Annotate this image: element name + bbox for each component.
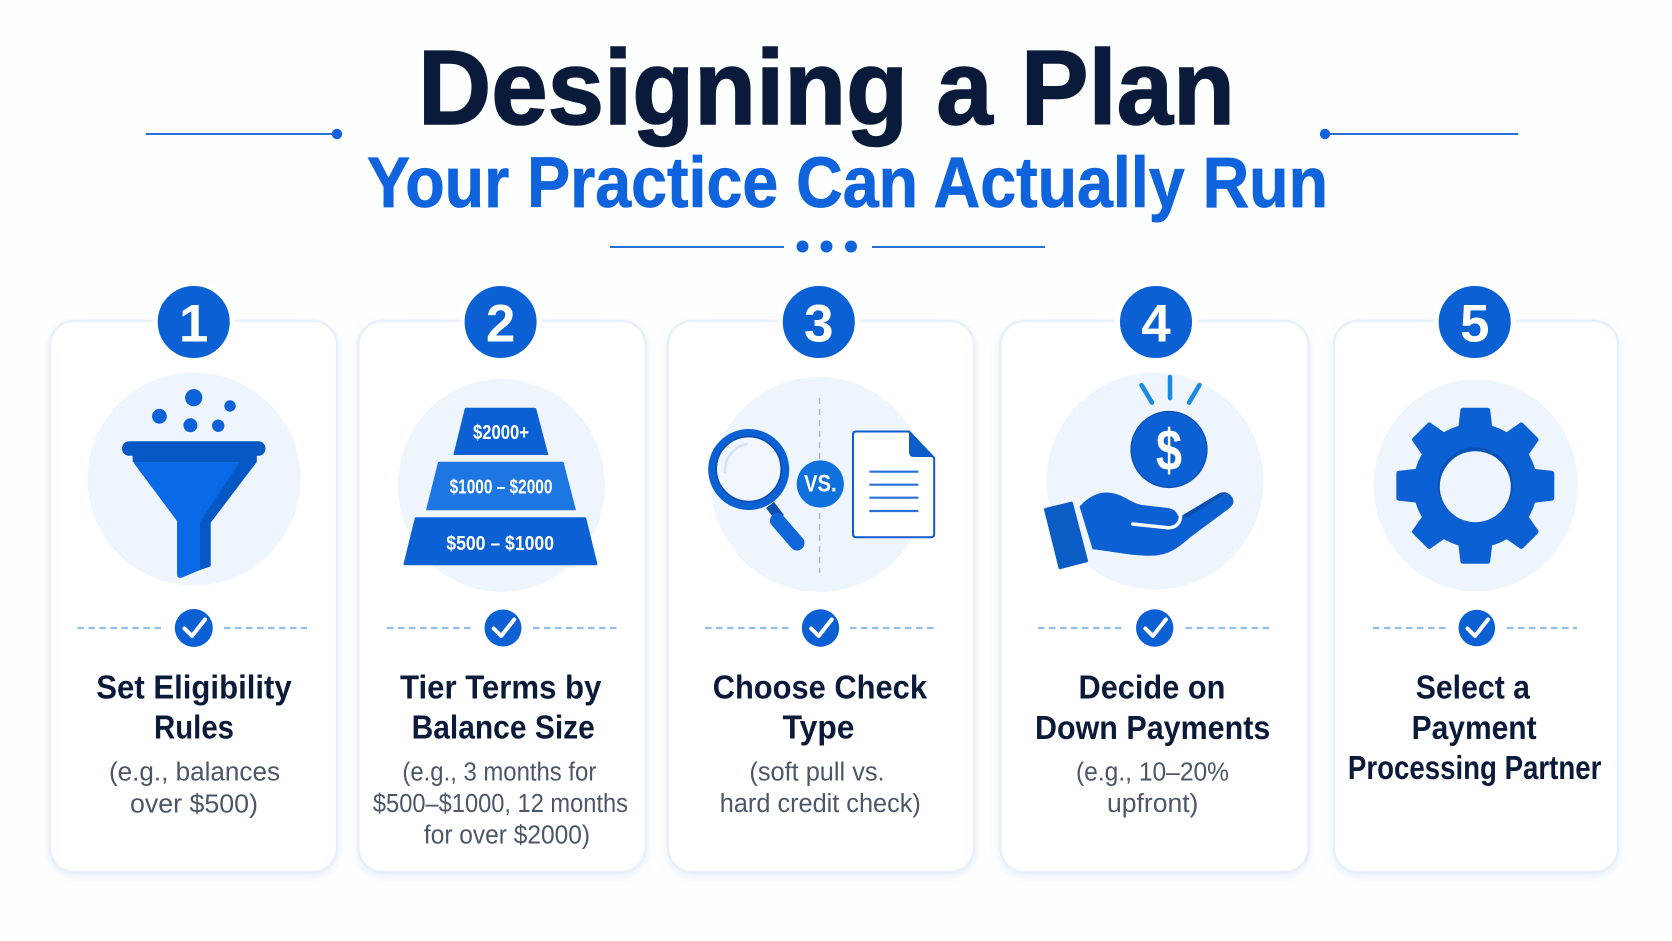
divider check xyxy=(705,609,936,647)
heading: select a payment processing partner xyxy=(1348,668,1602,786)
panel: step 4 xyxy=(1000,284,1308,872)
tier: top: $2000+ xyxy=(473,422,529,444)
number badge 1 xyxy=(155,284,232,360)
heading: select a payment processing partner: Select a xyxy=(1416,668,1531,705)
vs badge: VS. xyxy=(804,471,837,498)
icon: funnel xyxy=(88,372,300,586)
panel: step 5 xyxy=(1334,284,1618,872)
divider check xyxy=(1373,610,1577,646)
vs badge xyxy=(797,460,844,508)
number badge 4: 4 xyxy=(1141,294,1171,354)
heading: set eligibility rules: Set Eligibility xyxy=(96,668,292,705)
divider check xyxy=(77,609,307,647)
number badge 2: 2 xyxy=(486,294,515,354)
coin xyxy=(1131,412,1207,488)
text: example: upfront) xyxy=(1107,790,1198,818)
coin: $ xyxy=(1156,418,1182,483)
heading: decide on down payments: Decide on xyxy=(1078,668,1225,705)
text: example: for over $2000) xyxy=(424,822,590,850)
card background xyxy=(1000,321,1308,872)
tier: middle: $1000 – $2000 xyxy=(450,476,552,498)
text: example xyxy=(1076,758,1229,818)
text: example: $500–$1000, 12 months xyxy=(373,790,628,818)
text: example: (e.g., balances xyxy=(109,758,280,786)
icon: soft pull vs hard check xyxy=(712,377,934,592)
heading: tier terms by balance size: Balance Size xyxy=(412,708,595,745)
divider check xyxy=(387,610,617,646)
heading: tier terms by balance size: Tier Terms by xyxy=(400,668,602,705)
number badge 5: 5 xyxy=(1460,294,1489,354)
document xyxy=(853,432,934,537)
card background xyxy=(50,321,337,872)
tier: middle xyxy=(426,462,576,510)
divider check xyxy=(1038,609,1270,647)
tier: bottom: $500 – $1000 xyxy=(446,533,554,555)
heading: select a payment processing partner: Processing Partner xyxy=(1348,749,1602,786)
card background xyxy=(358,321,646,872)
text: example xyxy=(373,758,628,850)
heading: decide on down payments xyxy=(1035,668,1270,746)
rays xyxy=(1142,377,1200,403)
text: example: (e.g., 10–20% xyxy=(1076,758,1229,786)
heading: choose check type xyxy=(713,668,928,745)
heading: decide on down payments: Down Payments xyxy=(1035,709,1270,746)
hand xyxy=(1046,492,1233,568)
icon: tier pyramid xyxy=(398,379,605,592)
heading: tier terms by balance size xyxy=(400,668,602,745)
text: example: hard credit check) xyxy=(720,790,921,818)
magnifying glass xyxy=(712,433,797,543)
heading: set eligibility rules xyxy=(96,668,292,745)
number badge 3: 3 xyxy=(804,294,834,354)
heading: choose check type: Choose Check xyxy=(713,668,928,705)
number badge 4 xyxy=(1118,284,1194,360)
text: example: over $500) xyxy=(130,790,258,818)
text: example: (e.g., 3 months for xyxy=(402,758,597,786)
card background xyxy=(1334,321,1618,872)
icon: hand with coin xyxy=(1046,372,1264,590)
icon: gear xyxy=(1374,379,1578,591)
title xyxy=(367,29,1328,223)
tier: bottom xyxy=(404,517,597,565)
heading: select a payment processing partner: Payment xyxy=(1412,709,1537,746)
number badge 2 xyxy=(462,284,539,360)
panel: step 2 xyxy=(358,284,646,872)
number badge 5 xyxy=(1436,284,1513,360)
number badge 3 xyxy=(780,284,857,360)
text: example xyxy=(109,758,280,818)
heading: main title: Designing a Plan xyxy=(418,29,1235,147)
card background xyxy=(668,321,974,872)
panel: step 3 xyxy=(668,284,974,872)
heading: subtitle: Your Practice Can Actually Run xyxy=(367,144,1328,223)
panel: step 1 xyxy=(50,284,337,872)
heading: set eligibility rules: Rules xyxy=(154,708,234,745)
tier: top xyxy=(453,408,548,455)
number badge 1: 1 xyxy=(179,294,208,354)
heading: choose check type: Type xyxy=(783,708,854,745)
text: example: (soft pull vs. xyxy=(749,758,885,786)
text: example xyxy=(720,758,921,818)
